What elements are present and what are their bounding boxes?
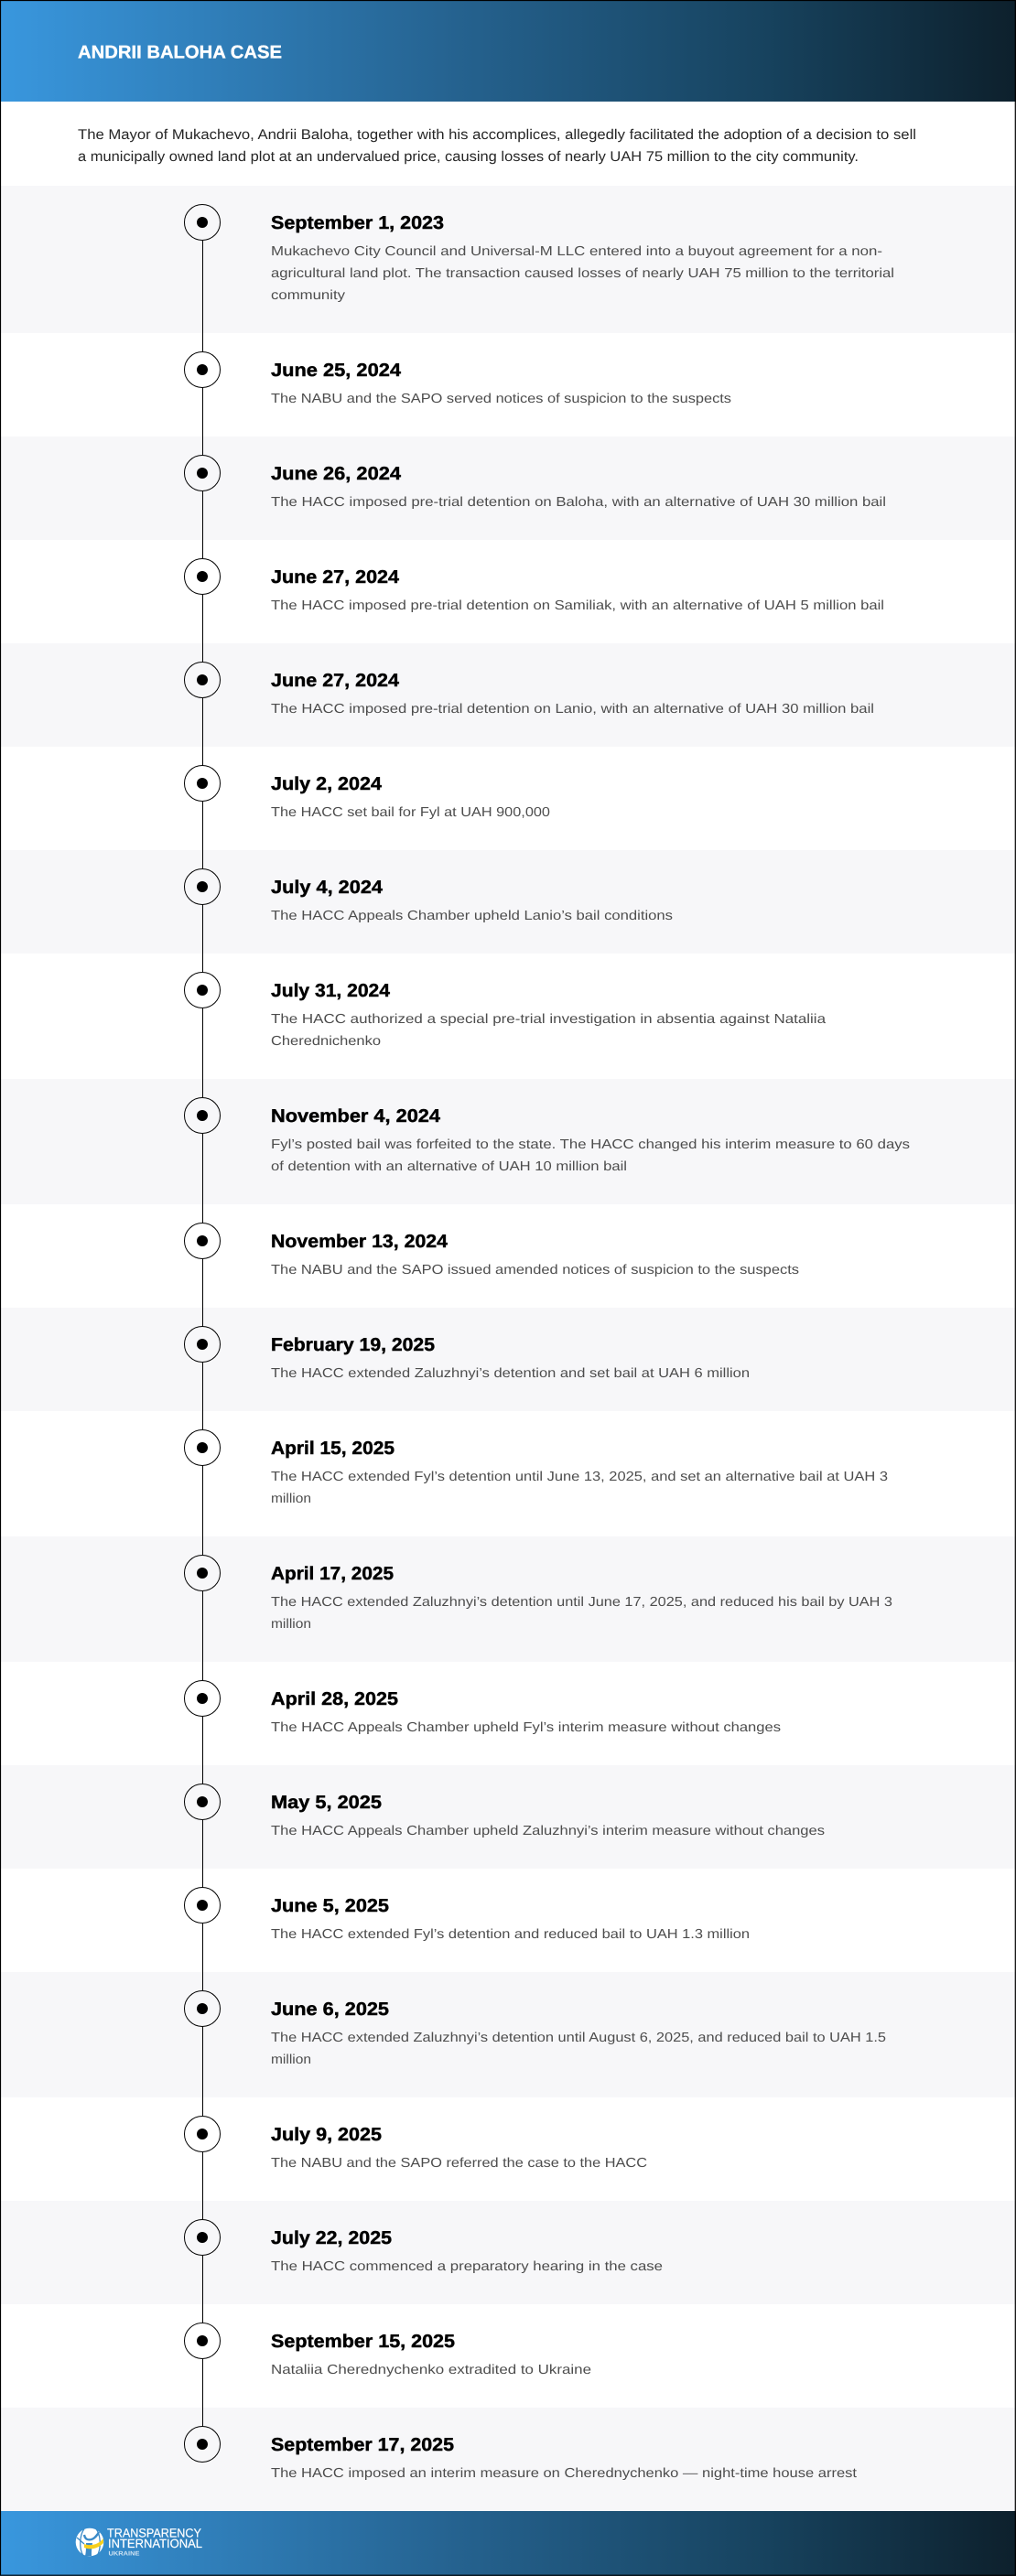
- description: [271, 1595, 892, 1632]
- date: September 17, 2025: [271, 2435, 454, 2455]
- description: [271, 2031, 886, 2067]
- date: February 19, 2025: [271, 1335, 435, 1355]
- description: community: [271, 288, 346, 303]
- event: April 17, 2025: [0, 1536, 1016, 1662]
- date: April 17, 2025: [271, 1564, 394, 1584]
- marker: [185, 456, 220, 490]
- event: November 13, 2024: [185, 1204, 799, 1308]
- logo wordmark: TRANSPARENCY: [107, 2526, 201, 2540]
- marker: [185, 2323, 220, 2359]
- intro text: [78, 127, 916, 165]
- date: July 2, 2024: [271, 774, 383, 794]
- description: The NABU and the SAPO issued amended notices of suspicion to the suspects: [271, 1263, 799, 1277]
- description: The HACC extended Fyl’s detention and reduced bail to UAH 1.3 million: [271, 1927, 750, 1942]
- description: million: [271, 1492, 311, 1506]
- header banner: [0, 0, 1016, 102]
- marker: [185, 765, 220, 802]
- description: [271, 1470, 888, 1506]
- intro text: The Mayor of Mukachevo, Andrii Baloha, together with his accomplices, allegedly facilitated the adoption of a decision to sell: [78, 127, 916, 143]
- marker: [185, 1556, 220, 1590]
- description: The HACC imposed pre-trial detention on Lanio, with an alternative of UAH 30 million bail: [271, 702, 874, 717]
- description: The HACC Appeals Chamber upheld Zaluzhnyi’s interim measure without changes: [271, 1824, 825, 1838]
- date: September 15, 2025: [271, 2332, 455, 2352]
- event: June 25, 2024: [185, 333, 731, 437]
- date: November 4, 2024: [271, 1106, 441, 1126]
- marker: [185, 2116, 220, 2152]
- icon: Transparency International globe logo: [76, 2528, 103, 2556]
- marker: [185, 1784, 220, 1819]
- description: The HACC set bail for Fyl at UAH 900,000: [271, 805, 550, 820]
- event: February 19, 2025: [0, 1308, 1016, 1411]
- marker: [185, 2220, 220, 2255]
- date: May 5, 2025: [271, 1793, 382, 1813]
- description: The NABU and the SAPO served notices of suspicion to the suspects: [271, 392, 731, 406]
- marker: [185, 1327, 220, 1362]
- event: July 4, 2024: [0, 850, 1016, 954]
- date: June 5, 2025: [271, 1896, 389, 1916]
- date: July 22, 2025: [271, 2228, 392, 2248]
- marker: [185, 205, 220, 240]
- logo wordmark: INTERNATIONAL: [108, 2537, 202, 2550]
- marker: [185, 663, 220, 697]
- description: The HACC Appeals Chamber upheld Lanio’s bail conditions: [271, 909, 673, 923]
- marker: [185, 558, 220, 595]
- marker: [185, 1887, 220, 1924]
- marker: [185, 1223, 220, 1259]
- date: April 15, 2025: [271, 1439, 395, 1459]
- description: [271, 1137, 910, 1174]
- marker: [185, 1098, 220, 1133]
- marker: [185, 1680, 220, 1717]
- event: June 6, 2025: [0, 1972, 1016, 2097]
- marker: [185, 351, 220, 388]
- marker: [185, 972, 220, 1008]
- event: May 5, 2025: [0, 1765, 1016, 1869]
- description: million: [271, 1617, 311, 1632]
- date: July 4, 2024: [271, 878, 384, 898]
- description: Cherednichenko: [271, 1034, 381, 1049]
- date: April 28, 2025: [271, 1689, 398, 1709]
- event: June 27, 2024 (Lanio): [0, 643, 1016, 747]
- description: [271, 1012, 827, 1049]
- event: July 22, 2025: [0, 2201, 1016, 2304]
- marker: [185, 869, 220, 904]
- description: The HACC imposed an interim measure on Cherednychenko — night-time house arrest: [271, 2466, 857, 2481]
- description: The NABU and the SAPO referred the case to the HACC: [271, 2156, 647, 2171]
- date: June 27, 2024: [271, 671, 400, 691]
- date: June 25, 2024: [271, 361, 402, 381]
- event: July 31, 2024: [185, 954, 827, 1079]
- date: September 1, 2023: [271, 213, 444, 233]
- logo wordmark: UKRAINE: [108, 2551, 140, 2557]
- marker: [185, 2427, 220, 2462]
- marker: [185, 1991, 220, 2026]
- event: April 28, 2025: [185, 1662, 781, 1765]
- description: million: [271, 2053, 311, 2067]
- description: Mukachevo City Council and Universal-M LLC entered into a buyout agreement for a non-: [271, 244, 882, 259]
- date: June 27, 2024: [271, 567, 400, 587]
- description: The HACC extended Zaluzhnyi’s detention until June 17, 2025, and reduced his bail by UAH 3: [271, 1595, 892, 1610]
- description: of detention with an alternative of UAH 10 million bail: [271, 1159, 627, 1174]
- description: The HACC imposed pre-trial detention on Baloha, with an alternative of UAH 30 million bail: [271, 495, 886, 510]
- date: June 26, 2024: [271, 464, 402, 484]
- description: Fyl’s posted bail was forfeited to the state. The HACC changed his interim measure to 60 days: [271, 1137, 910, 1152]
- intro text: a municipally owned land plot at an undervalued price, causing losses of nearly UAH 75 million to the city community.: [78, 149, 859, 165]
- footer banner: [0, 2511, 1016, 2576]
- description: agricultural land plot. The transaction caused losses of nearly UAH 75 million to the territorial: [271, 266, 894, 281]
- event: September 15, 2025: [185, 2304, 591, 2408]
- description: The HACC Appeals Chamber upheld Fyl’s interim measure without changes: [271, 1720, 781, 1735]
- date: June 6, 2025: [271, 1999, 389, 2020]
- date: November 13, 2024: [271, 1232, 449, 1252]
- event: July 9, 2025: [185, 2097, 647, 2201]
- title: ANDRII BALOHA CASE: [78, 42, 282, 62]
- marker: [185, 1429, 220, 1466]
- event: July 2, 2024: [185, 747, 550, 850]
- logo wordmark: [107, 2526, 202, 2557]
- event: September 1, 2023: [0, 186, 1016, 333]
- date: July 31, 2024: [271, 981, 391, 1001]
- description: The HACC extended Fyl’s detention until June 13, 2025, and set an alternative bail at UAH 3: [271, 1470, 888, 1484]
- description: The HACC extended Zaluzhnyi’s detention and set bail at UAH 6 million: [271, 1366, 750, 1381]
- event: September 17, 2025: [0, 2408, 1016, 2511]
- description: The HACC imposed pre-trial detention on Samiliak, with an alternative of UAH 5 million bail: [271, 598, 884, 613]
- description: The HACC extended Zaluzhnyi’s detention until August 6, 2025, and reduced bail to UAH 1.5: [271, 2031, 886, 2045]
- event: June 26, 2024: [0, 437, 1016, 540]
- description: Nataliia Cherednychenko extradited to Ukraine: [271, 2363, 591, 2377]
- event: November 4, 2024: [0, 1079, 1016, 1204]
- description: [271, 244, 894, 303]
- description: The HACC authorized a special pre-trial investigation in absentia against Nataliia: [271, 1012, 827, 1027]
- event: June 27, 2024 (Samiliak): [185, 540, 884, 643]
- event: April 15, 2025: [185, 1411, 888, 1536]
- event: June 5, 2025: [185, 1869, 750, 1972]
- date: July 9, 2025: [271, 2125, 382, 2145]
- description: The HACC commenced a preparatory hearing in the case: [271, 2259, 663, 2274]
